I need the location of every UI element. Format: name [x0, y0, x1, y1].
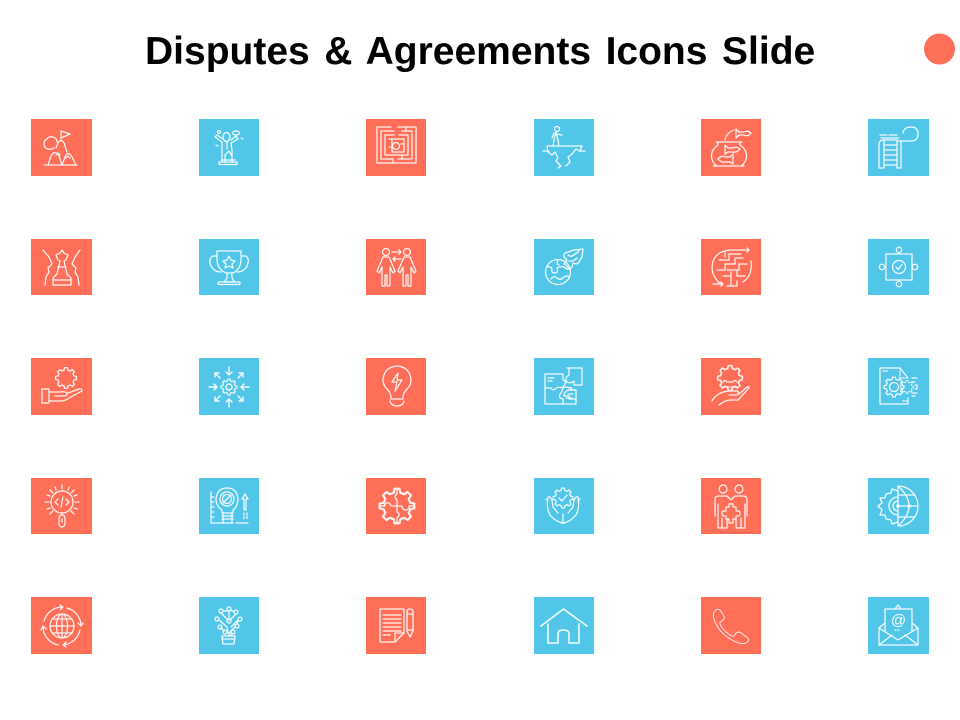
tile: trophy	[199, 239, 259, 295]
icon: two people and arrows	[377, 248, 416, 286]
tile: ladder and pool	[868, 119, 929, 176]
icon: open hand and gear	[712, 366, 749, 405]
tile: light bulb	[366, 358, 426, 415]
tile: email	[868, 597, 929, 654]
icon: gear made of puzzle pieces	[379, 489, 414, 523]
title: Disputes & Agreements Icons Slide	[145, 30, 815, 73]
tile: fish bowl	[701, 119, 761, 176]
tile: approved process	[868, 239, 929, 295]
tile: circular maze	[701, 239, 761, 295]
icon: arrows pointing to gear	[209, 367, 249, 407]
icon: mountains and flag	[44, 131, 77, 165]
icon: two hands and check gear	[546, 488, 580, 523]
icon: check in framed nodes	[879, 247, 918, 287]
icon: open envelope with at sign	[879, 605, 918, 645]
tile: bulb blueprint	[199, 478, 259, 534]
decorative coral dot	[924, 34, 955, 64]
icon: person crossing a gap	[543, 126, 585, 168]
tile: walker over crack	[534, 119, 594, 176]
tile: people with puzzle	[701, 478, 761, 534]
tile: puzzle globe	[534, 239, 594, 295]
icon: maze	[377, 127, 416, 163]
tile: hands holding gear	[534, 478, 594, 534]
icon: two partners joining puzzle	[715, 485, 747, 528]
icon: three jigsaw pieces	[545, 368, 582, 404]
icon: circular maze with arrows	[712, 248, 751, 286]
icon: globe with puzzle pieces	[546, 249, 583, 284]
icon: hand holding gear piece	[42, 368, 82, 403]
icon: jumping fish and bowl	[712, 129, 751, 166]
icon: phone handset	[713, 609, 749, 644]
icon: bulb with chart axes	[211, 488, 248, 523]
tile: document and pencil	[366, 597, 426, 654]
icon: bulb with lightning	[383, 366, 411, 406]
tile: network plant	[199, 597, 259, 654]
tile: globe with arrows	[31, 597, 92, 654]
tile: victorious person	[199, 119, 259, 176]
tile: chess queen	[31, 239, 92, 295]
icon: magnifier with code	[45, 485, 79, 527]
tile: mountain with flag	[31, 119, 92, 176]
tile: house	[534, 597, 594, 654]
icon: globe and rotation arrows	[41, 605, 83, 647]
icon: steps with loop	[879, 127, 918, 168]
tile: code under magnifier	[31, 478, 92, 534]
icon: document and gears	[880, 368, 917, 404]
tile: hand with gear	[701, 358, 761, 415]
tile: gear and globe	[868, 478, 929, 534]
icon: home	[541, 609, 587, 643]
tile: hand with puzzle piece	[31, 358, 92, 415]
icon: half gear half globe	[878, 486, 918, 526]
icon: bulb-shaped node tree	[215, 607, 242, 644]
icon: chess piece between faces	[43, 250, 80, 285]
tile: gear puzzle	[366, 478, 426, 534]
tile: square maze	[366, 119, 426, 176]
tile: telephone	[701, 597, 761, 654]
tile: two people exchanging	[366, 239, 426, 295]
tile: gear with arrows	[199, 358, 259, 415]
icon label: at sign: @	[891, 612, 906, 629]
tile: document with gears	[868, 358, 929, 415]
tile: jigsaw pieces	[534, 358, 594, 415]
icon: note with pencil	[380, 609, 413, 642]
icon: trophy with star	[210, 251, 248, 284]
icon: person on pedestal	[215, 130, 243, 164]
